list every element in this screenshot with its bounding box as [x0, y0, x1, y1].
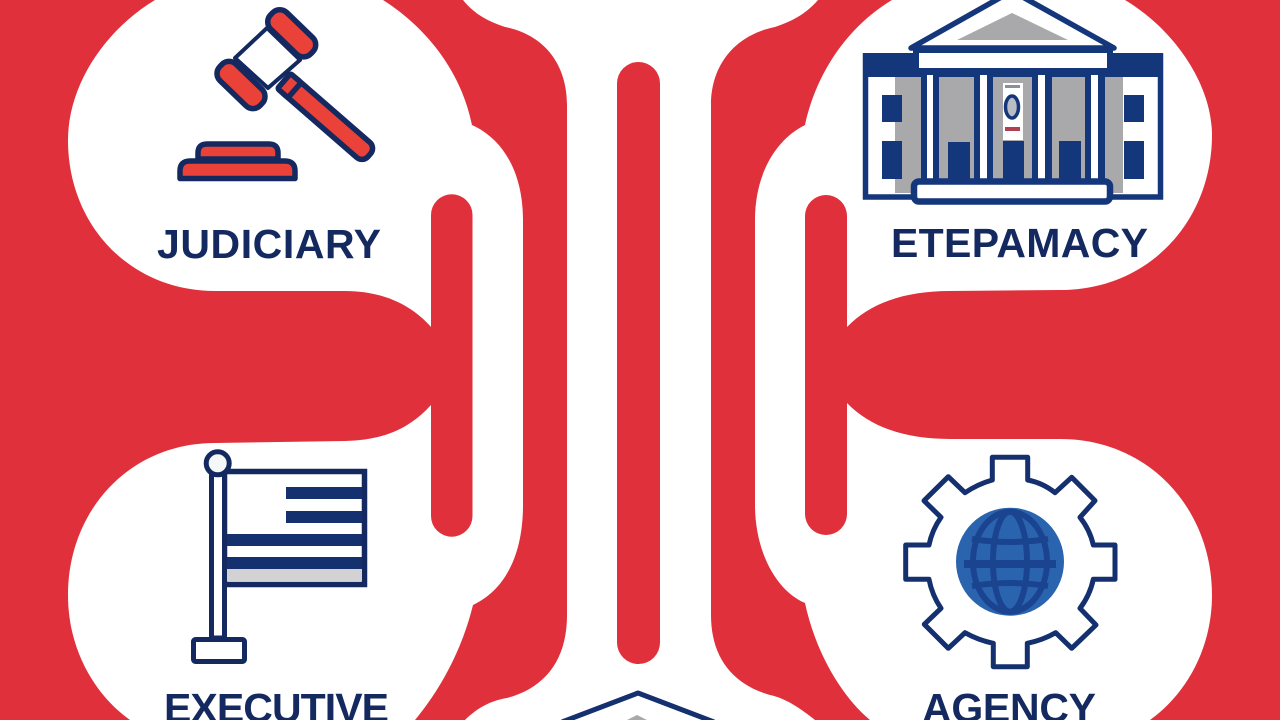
flag pole — [212, 472, 224, 638]
icon: flag — [194, 452, 364, 662]
gavel block lower — [180, 161, 295, 178]
flag grey stripe — [227, 569, 362, 581]
side windows — [882, 95, 1144, 179]
gavel body — [235, 28, 300, 88]
roof grey fill — [623, 715, 651, 720]
gear outline — [906, 457, 1115, 667]
globe disc — [956, 508, 1064, 616]
icon: bottom building roof — [562, 693, 714, 720]
building base — [914, 182, 1110, 202]
flag stripes — [227, 487, 362, 569]
flag base — [194, 640, 244, 662]
roof outline — [562, 693, 714, 720]
gavel block upper — [198, 144, 278, 159]
pediment grey — [957, 13, 1068, 40]
icon: gear with globe — [906, 457, 1115, 667]
wing band — [863, 53, 1163, 77]
gavel handle — [277, 73, 376, 163]
columns — [921, 74, 1105, 182]
flag field — [224, 472, 364, 584]
panel: right red strip — [711, 0, 892, 720]
icon: gavel — [180, 6, 376, 178]
doors — [948, 141, 1081, 182]
heading: etepamacy: ETEPAMACY — [891, 220, 1148, 266]
entablature white — [919, 53, 1107, 68]
gavel upper head — [264, 6, 320, 61]
roof — [911, 0, 1114, 48]
globe grid — [964, 512, 1056, 612]
heading: judiciary: JUDICIARY — [157, 221, 381, 267]
panel: left red strip — [383, 0, 567, 720]
icon: courthouse — [863, 0, 1163, 202]
panel: left red field with tongue and pill — [0, 0, 472, 720]
entablature — [913, 47, 1113, 74]
panel: right red field with tongue and pill — [805, 0, 1280, 720]
grey wall — [895, 77, 1123, 193]
centre window emblem — [1003, 83, 1023, 140]
gavel lower head — [213, 57, 269, 113]
flag finial — [206, 452, 229, 475]
panel: central red pill — [617, 62, 660, 664]
building body — [866, 56, 1160, 197]
